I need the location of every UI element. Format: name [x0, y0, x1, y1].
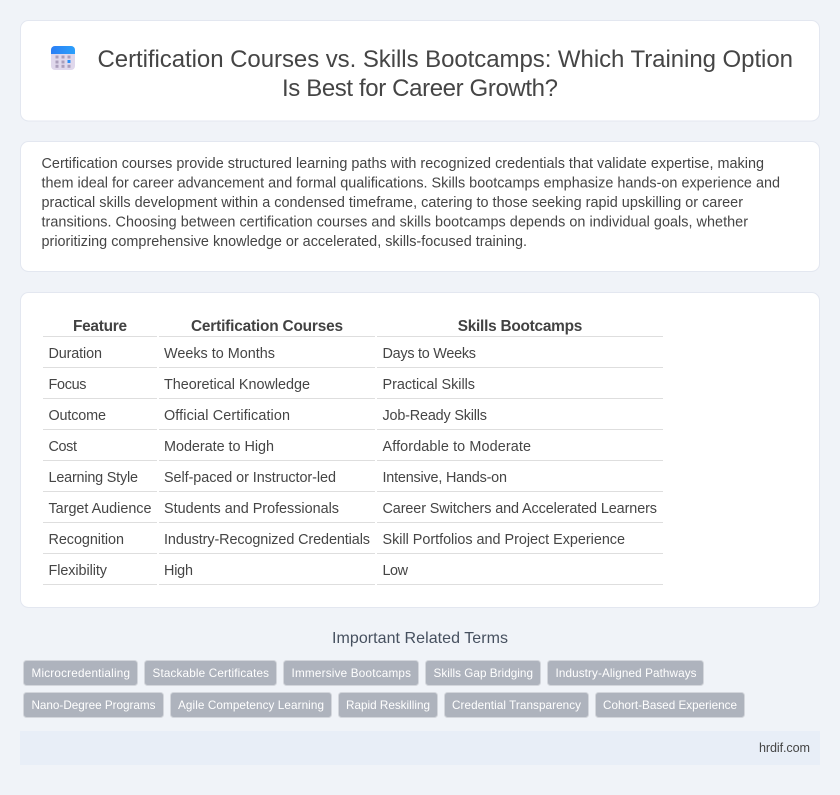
- tag: rapid reskilling: [338, 692, 438, 718]
- tag: nano-degree programs: [24, 692, 164, 718]
- footer: [20, 731, 820, 765]
- tag: industry-aligned pathways: [548, 660, 704, 686]
- row: flexibility: Flexibility: [48, 563, 108, 579]
- row: target audience: Career Switchers and Accelerated Learners: [382, 501, 657, 517]
- table header row: Skills Bootcamps: [458, 318, 582, 335]
- row: flexibility: [48, 563, 409, 579]
- row: target audience: Students and Professionals: [164, 501, 339, 517]
- row: recognition: Skill Portfolios and Project Experience: [382, 532, 625, 548]
- tag: skills gap bridging: Skills Gap Bridging: [434, 667, 533, 680]
- row: flexibility: Low: [382, 563, 409, 579]
- row: cost: Cost: [48, 439, 77, 455]
- row: cost: Affordable to Moderate: [382, 439, 531, 455]
- row: duration: Weeks to Months: [164, 346, 275, 362]
- text block: description paragraph: Certification courses provide structured learning paths with recognized credentials that validate expertise, making: [42, 156, 764, 172]
- tag: cohort-based experience: [596, 692, 744, 718]
- row: duration: Duration: [48, 346, 102, 362]
- tags: related terms: [24, 660, 744, 718]
- table rules: [43, 336, 663, 585]
- icon: calendar: [51, 46, 75, 70]
- tag: stackable certificates: Stackable Certificates: [152, 667, 269, 680]
- row: learning style: Intensive, Hands-on: [382, 470, 507, 486]
- row: learning style: Self-paced or Instructor-led: [164, 470, 336, 486]
- tag: microcredentialing: Microcredentialing: [32, 667, 130, 680]
- row: target audience: Target Audience: [48, 501, 152, 517]
- row: recognition: Industry-Recognized Credentials: [164, 532, 370, 548]
- row: duration: Days to Weeks: [382, 346, 476, 362]
- row: focus: Practical Skills: [382, 377, 475, 393]
- panel: description: [20, 142, 820, 272]
- tag: stackable certificates: [144, 660, 276, 686]
- row: duration: [48, 346, 476, 362]
- text block: description paragraph: transitions. Choosing between certification courses and skills bootcamps depends on individual goals, whether: [42, 214, 748, 230]
- tag: immersive bootcamps: Immersive Bootcamps: [292, 667, 411, 680]
- title: Certification Courses vs. Skills Bootcamps: Which Training Option: [98, 46, 793, 73]
- row: flexibility: High: [164, 563, 193, 579]
- tag: credential transparency: Credential Transparency: [452, 699, 581, 712]
- text block: description paragraph: [42, 156, 780, 250]
- row: target audience: [48, 501, 657, 517]
- row: learning style: Learning Style: [48, 470, 138, 486]
- footer source: hrdif.com: [759, 741, 810, 755]
- row: outcome: [48, 408, 487, 424]
- tag: immersive bootcamps: [284, 660, 418, 686]
- text block: description paragraph: prioritizing comprehensive knowledge or accelerated, skills-focused training.: [42, 234, 527, 250]
- tag: skills gap bridging: [426, 660, 540, 686]
- table header row: Certification Courses: [191, 318, 343, 335]
- row: focus: Focus: [48, 377, 86, 393]
- text block: description paragraph: practical skills development within a condensed timeframe, catering to those seeking rapid upskilling or career: [42, 195, 743, 211]
- row: cost: Moderate to High: [164, 439, 274, 455]
- row: outcome: Outcome: [48, 408, 106, 424]
- row: focus: Theoretical Knowledge: [164, 377, 310, 393]
- title: Is Best for Career Growth?: [282, 75, 558, 102]
- tag: agile competency learning: Agile Competency Learning: [178, 699, 324, 712]
- tag: industry-aligned pathways: Industry-Aligned Pathways: [556, 667, 697, 680]
- row: focus: [48, 377, 475, 393]
- panel: header: [20, 20, 820, 121]
- tag: rapid reskilling: Rapid Reskilling: [346, 699, 430, 712]
- table header row: Feature: [73, 318, 127, 335]
- row: learning style: [48, 470, 507, 486]
- row: recognition: [48, 532, 625, 548]
- table header row: [73, 318, 582, 335]
- row: outcome: Official Certification: [164, 408, 290, 424]
- row: outcome: Job-Ready Skills: [382, 408, 487, 424]
- tag: nano-degree programs: Nano-Degree Programs: [32, 699, 156, 712]
- panel: comparison table: [20, 292, 820, 608]
- title: [98, 46, 793, 102]
- tag: microcredentialing: [24, 660, 138, 686]
- row: recognition: Recognition: [48, 532, 124, 548]
- heading: important related terms: Important Related Terms: [332, 630, 508, 647]
- text block: description paragraph: them ideal for career advancement and formal qualifications. Skills bootcamps emphasize hands-on experience and: [42, 176, 780, 192]
- tag: agile competency learning: [170, 692, 332, 718]
- row: cost: [48, 439, 531, 455]
- tag: cohort-based experience: Cohort-Based Experience: [603, 699, 737, 712]
- tag: credential transparency: [444, 692, 588, 718]
